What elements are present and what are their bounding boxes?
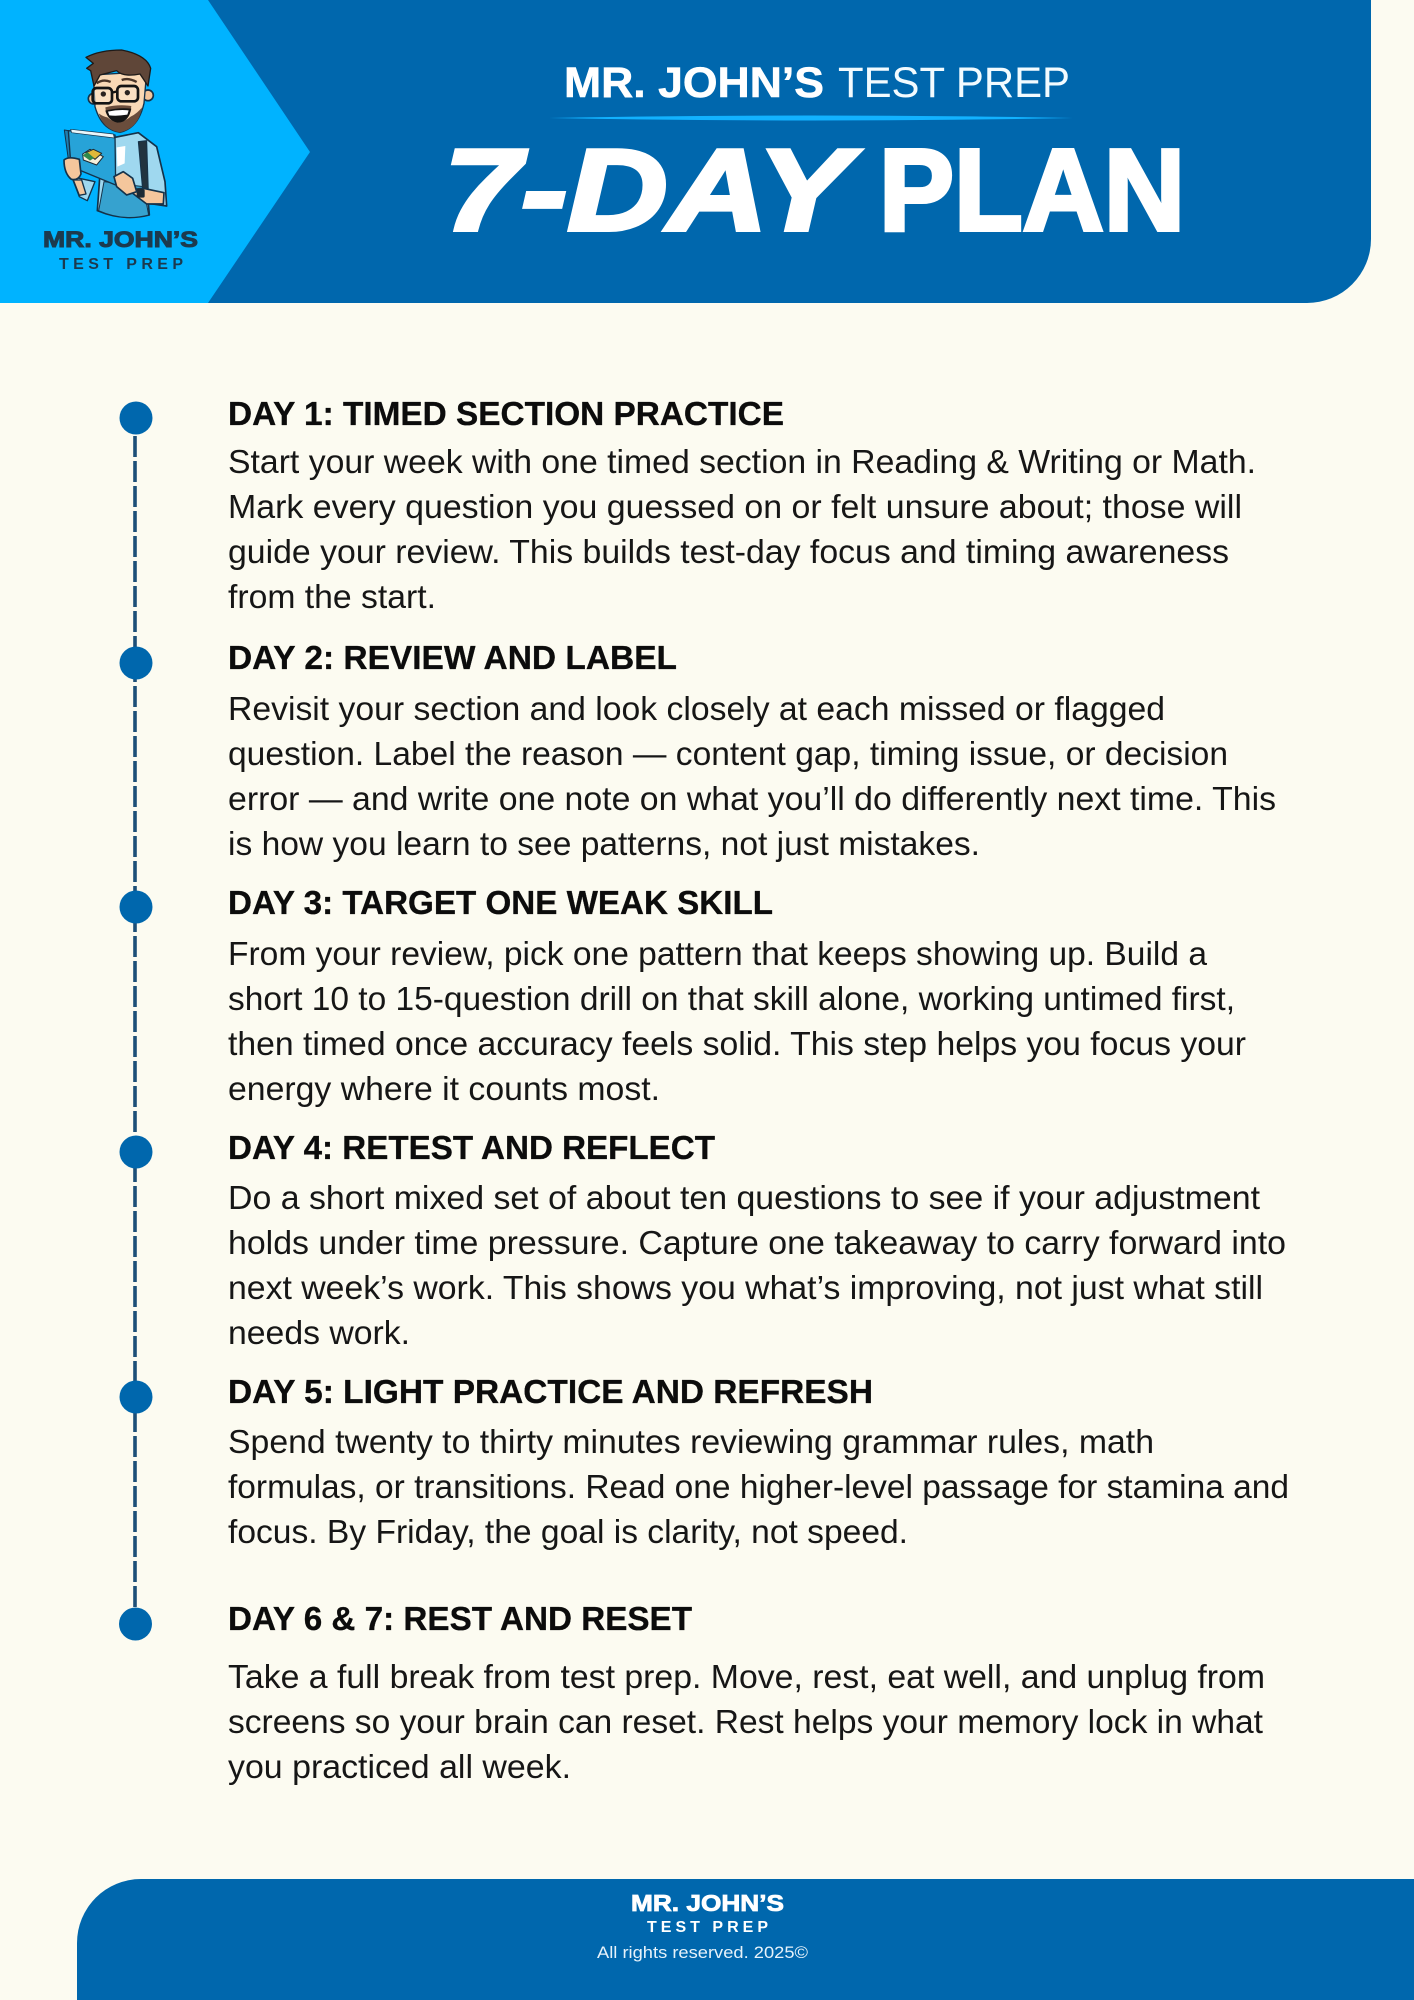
day 3 heading: DAY 3: TARGET ONE WEAK SKILL xyxy=(228,884,773,921)
footer wordmark: MR. JOHN’S xyxy=(631,1890,784,1916)
day 4 block xyxy=(228,1129,1286,1351)
day 4 body: next week’s work. This shows you what’s improving, not just what still xyxy=(228,1269,1263,1306)
torso xyxy=(97,133,167,218)
day 6 and 7 heading: DAY 6 & 7: REST AND RESET xyxy=(228,1600,692,1637)
header subtitle: Mr. John's Test Prep: TEST PREP xyxy=(838,59,1070,107)
footer copyright: All rights reserved. 2025© xyxy=(597,1943,809,1962)
day 4 body: holds under time pressure. Capture one takeaway to carry forward into xyxy=(228,1224,1286,1261)
day 6 and 7 body: screens so your brain can reset. Rest helps your memory lock in what xyxy=(228,1703,1263,1740)
day 2 body xyxy=(228,690,1276,862)
header subtitle: Mr. John's Test Prep: MR. JOHN’S xyxy=(564,59,824,107)
icon: teacher mascot holding a book xyxy=(64,50,167,218)
logo panel xyxy=(0,0,310,303)
main title: 7-Day Plan: 7-DAY xyxy=(444,125,862,255)
day 5 block xyxy=(228,1373,1289,1550)
day 5 heading: DAY 5: LIGHT PRACTICE AND REFRESH xyxy=(228,1373,873,1410)
day 5 body xyxy=(228,1423,1289,1550)
day 3 body: From your review, pick one pattern that keeps showing up. Build a xyxy=(228,935,1208,972)
day 6 and 7 body: you practiced all week. xyxy=(228,1748,571,1785)
day 4 body xyxy=(228,1179,1286,1351)
left arm xyxy=(72,177,95,201)
face xyxy=(93,72,147,132)
header subtitle: Mr. John's Test Prep xyxy=(564,59,1070,107)
day 1 block xyxy=(228,395,1256,615)
timeline xyxy=(119,402,152,1640)
day 2 body: is how you learn to see patterns, not just mistakes. xyxy=(228,825,980,862)
day 3 body: short 10 to 15-question drill on that skill alone, working untimed first, xyxy=(228,980,1235,1017)
logo wordmark: TEST PREP xyxy=(59,256,183,273)
hands xyxy=(64,158,81,180)
day 2 body: error — and write one note on what you’ll do differently next time. This xyxy=(228,780,1276,817)
day 1 body: Start your week with one timed section in Reading & Writing or Math. xyxy=(228,443,1256,480)
day 1 heading: DAY 1: TIMED SECTION PRACTICE xyxy=(228,395,784,432)
day 3 block xyxy=(228,884,1246,1107)
day 4 body: Do a short mixed set of about ten questions to see if your adjustment xyxy=(228,1179,1260,1216)
footer panel xyxy=(77,1879,1414,2000)
day 4 body: needs work. xyxy=(228,1314,410,1351)
day 3 body xyxy=(228,935,1246,1107)
glasses xyxy=(93,86,138,103)
day 3 body: then timed once accuracy feels solid. This step helps you focus your xyxy=(228,1025,1246,1062)
day 4 heading: DAY 4: RETEST AND REFLECT xyxy=(228,1129,715,1166)
ears xyxy=(88,93,99,104)
right forearm xyxy=(128,188,164,204)
day 2 body: question. Label the reason — content gap, timing issue, or decision xyxy=(228,735,1228,772)
day 1 body xyxy=(228,443,1256,615)
hair xyxy=(86,50,151,86)
main title: 7-Day Plan: PLAN xyxy=(879,125,1185,255)
logo wordmark xyxy=(43,227,198,273)
day 6 and 7 block xyxy=(228,1600,1265,1785)
day 1 body: Mark every question you guessed on or felt unsure about; those will xyxy=(228,488,1242,525)
day 3 body: energy where it counts most. xyxy=(228,1070,660,1107)
main title: 7-Day Plan xyxy=(444,125,1185,255)
day 6 and 7 body: Take a full break from test prep. Move, rest, eat well, and unplug from xyxy=(228,1658,1265,1695)
day 2 block xyxy=(228,639,1276,862)
footer wordmark: TEST PREP xyxy=(647,1919,768,1936)
day 2 heading: DAY 2: REVIEW AND LABEL xyxy=(228,639,677,676)
header banner xyxy=(0,0,1371,303)
day 5 body: Spend twenty to thirty minutes reviewing grammar rules, math xyxy=(228,1423,1154,1460)
day 2 body: Revisit your section and look closely at each missed or flagged xyxy=(228,690,1165,727)
beard xyxy=(99,107,142,132)
logo wordmark: MR. JOHN’S xyxy=(43,227,198,252)
day 1 body: from the start. xyxy=(228,578,436,615)
day 6 and 7 body xyxy=(228,1658,1265,1785)
header accent line xyxy=(549,116,1073,120)
footer wordmark xyxy=(631,1890,784,1936)
day 5 body: formulas, or transitions. Read one higher-level passage for stamina and xyxy=(228,1468,1289,1505)
book xyxy=(64,130,72,170)
day 1 body: guide your review. This builds test-day focus and timing awareness xyxy=(228,533,1229,570)
day 5 body: focus. By Friday, the goal is clarity, not speed. xyxy=(228,1513,908,1550)
